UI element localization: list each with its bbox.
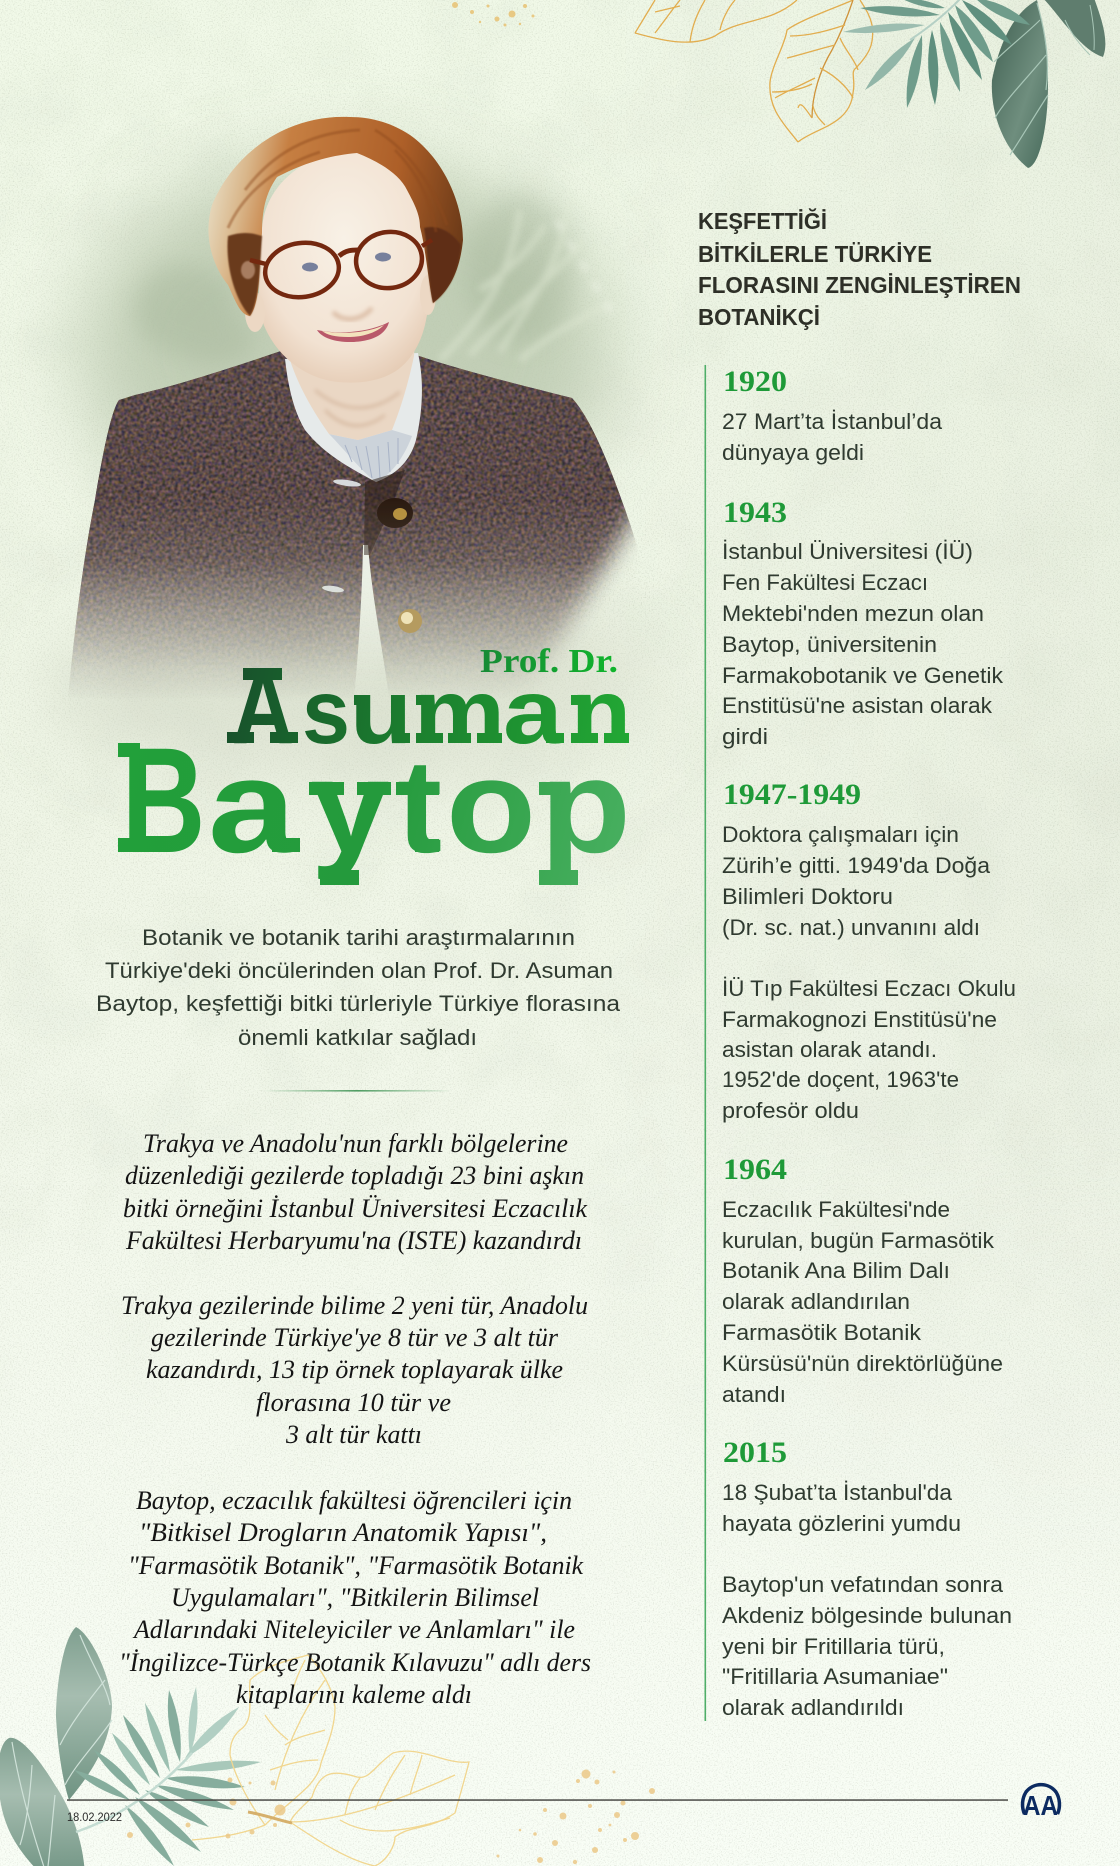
mouth <box>317 322 389 342</box>
paragraph: books: kitaplarını kaleme aldı <box>236 1680 472 1709</box>
paragraph: herbarium <box>123 1129 587 1255</box>
timeline entry: 1947-1949: profesör oldu <box>722 1098 859 1123</box>
timeline entry: 1943: İstanbul Üniversitesi (İÜ) <box>722 539 973 564</box>
title: Baytop: t <box>397 733 442 881</box>
timeline entry: 1920: dünyaya geldi <box>722 440 864 465</box>
title: Baytop: y <box>311 733 389 881</box>
timeline entry: 1943: Enstitüsü'ne asistan olarak <box>722 693 993 718</box>
button: dark <box>377 498 413 528</box>
timeline entry: 1947-1949: 1947-1949 <box>723 778 861 811</box>
date: 18.02.2022 <box>67 1812 122 1824</box>
timeline entry: 2015 <box>722 1436 1012 1720</box>
paragraph: books <box>119 1486 591 1709</box>
timeline entry: 1920: 27 Mart’ta İstanbul’da <box>722 409 943 434</box>
right column heading: FLORASINI ZENGİNLEŞTİREN <box>698 272 1021 298</box>
decoration: gold splatter top <box>452 2 534 26</box>
decoration: bottom left leaves <box>0 1627 261 1866</box>
face <box>259 150 429 383</box>
paragraph: books: "İngilizce-Türkçe Botanik Kılavuzu" adlı ders <box>119 1648 591 1677</box>
decoration: bottom gold outline leaves <box>192 1655 469 1866</box>
paragraph: herbarium: Fakültesi Herbaryumu'na (ISTE) kazandırdı <box>125 1226 582 1255</box>
title: Asuman: A <box>232 650 294 765</box>
timeline entry: 2015: Akdeniz bölgesinde bulunan <box>722 1603 1012 1628</box>
paragraph: species: Trakya gezilerinde bilime 2 yeni tür, Anadolu <box>121 1291 588 1320</box>
paragraph: books: Baytop, eczacılık fakültesi öğrencileri için <box>136 1486 572 1515</box>
right column heading: BOTANİKÇİ <box>698 304 820 330</box>
timeline entry: 1943: Mektebi'nden mezun olan <box>722 601 984 626</box>
timeline entry: 1964: olarak adlandırılan <box>722 1289 910 1314</box>
timeline entry: 1920: 1920 <box>723 365 787 398</box>
timeline entry: 1964: Eczacılık Fakültesi'nde <box>722 1197 950 1222</box>
jacket and clothing <box>69 351 636 690</box>
timeline entry: 1964: 1964 <box>723 1153 787 1186</box>
timeline entry: 1947-1949: Bilimleri Doktoru <box>722 884 893 909</box>
title: Asuman: n <box>571 662 631 763</box>
paragraph: herbarium: Trakya ve Anadolu'nun farklı bölgelerine <box>143 1129 568 1158</box>
neck <box>290 351 414 440</box>
right column heading: BİTKİLERLE TÜRKİYE <box>698 241 932 267</box>
paragraph: herbarium: düzenlediği gezilerde topladığı 23 bini aşkın <box>125 1161 584 1190</box>
decoration: bottom gold splatter <box>127 1770 655 1864</box>
timeline entry: 1947-1949: İÜ Tıp Fakültesi Eczacı Okulu <box>722 976 1016 1001</box>
decoration: palm and dark leaves top right <box>843 0 1105 168</box>
timeline entry: 1943 <box>722 496 1004 749</box>
timeline entry: 1943: girdi <box>722 724 768 749</box>
timeline entry: 1964: Botanik Ana Bilim Dalı <box>722 1258 950 1283</box>
timeline entry: 1943: Fen Fakültesi Eczacı <box>722 570 928 595</box>
paragraph: books: Adlarındaki Niteleyiciler ve Anlamları" ile <box>132 1615 575 1644</box>
intro paragraph: Botanik ve botanik tarihi araştırmalarının <box>142 925 575 950</box>
title: Baytop: B <box>122 716 206 884</box>
timeline entry: 1920 <box>722 365 943 465</box>
right column heading <box>698 207 1021 330</box>
shirt collar <box>285 353 422 482</box>
intro paragraph: Baytop, keşfettiği bitki türleriyle Türkiye florasına <box>96 991 621 1016</box>
title: Asuman: m <box>414 662 505 763</box>
timeline entry: 2015: yeni bir Fritillaria türü, <box>722 1634 945 1659</box>
timeline entry: 2015: 2015 <box>723 1436 787 1469</box>
timeline <box>704 365 1016 1721</box>
biography italic text <box>119 1129 591 1709</box>
timeline entry: 1947-1949: Zürih’e gitti. 1949'da Doğa <box>722 853 991 878</box>
right column heading: KEŞFETTİĞİ <box>698 207 827 234</box>
nose shadow <box>333 308 372 319</box>
timeline entry: 2015: "Fritillaria Asumaniae" <box>722 1664 948 1689</box>
title: Asuman: s <box>302 662 350 763</box>
timeline entry: 1943: Baytop, üniversitenin <box>722 632 937 657</box>
glasses <box>250 228 432 302</box>
paragraph: species: kazandırdı, 13 tip örnek toplayarak ülke <box>146 1355 563 1384</box>
timeline entry: 2015: hayata gözlerini yumdu <box>722 1511 961 1536</box>
timeline entry: 1964: kurulan, bugün Farmasötik <box>722 1228 995 1253</box>
shirt placket <box>355 545 388 690</box>
paragraph: books: Uygulamaları", "Bitkilerin Bilimsel <box>171 1583 539 1612</box>
eyes <box>302 252 391 272</box>
paragraph: species: 3 alt tür kattı <box>285 1420 422 1449</box>
title: Asuman <box>227 650 631 765</box>
title: Asuman: u <box>350 662 412 763</box>
head <box>208 117 463 383</box>
timeline entry: 2015: olarak adlandırıldı <box>722 1695 904 1720</box>
footer <box>67 1785 1059 1824</box>
title: Asuman: a <box>503 662 565 763</box>
paragraph: books: "Bitkisel Drogların Anatomik Yapısı", <box>139 1518 547 1547</box>
timeline entry: 1947-1949: asistan olarak atandı. <box>722 1037 937 1062</box>
title: Baytop: a <box>208 733 297 881</box>
timeline entry: 1947-1949: (Dr. sc. nat.) unvanını aldı <box>722 915 980 940</box>
timeline entry: 1947-1949: Doktora çalışmaları için <box>722 822 959 847</box>
photo background haze <box>50 160 650 780</box>
timeline entry: 1964: atandı <box>722 1382 786 1407</box>
timeline entry: 1943: Farmakobotanik ve Genetik <box>722 663 1004 688</box>
paragraph: books: "Farmasötik Botanik", "Farmasötik Botanik <box>128 1551 583 1580</box>
timeline entry: 1964: Farmasötik Botanik <box>722 1320 922 1345</box>
timeline entry: 1964 <box>722 1153 1003 1407</box>
portrait photograph <box>50 117 660 780</box>
intro paragraph: Türkiye'deki öncülerinden olan Prof. Dr. Asuman <box>105 958 613 983</box>
paragraph: species <box>121 1291 588 1449</box>
decoration: gold outline leaves top <box>635 0 873 142</box>
paragraph: herbarium: bitki örneğini İstanbul Üniversitesi Eczacılık <box>123 1194 587 1223</box>
paragraph: species: florasına 10 tür ve <box>256 1388 451 1417</box>
timeline entry: 2015: 18 Şubat’ta İstanbul'da <box>722 1480 953 1505</box>
timeline entry: 1947-1949: Farmakognozi Enstitüsü'ne <box>722 1007 997 1032</box>
paragraph: species: gezilerinde Türkiye'ye 8 tür ve 3 alt tür <box>151 1323 559 1352</box>
title: Baytop: p <box>540 733 631 881</box>
timeline entry: 1964: Kürsüsü'nün direktörlüğüne <box>722 1351 1003 1376</box>
timeline entry: 1943: 1943 <box>723 496 787 529</box>
title: Prof. Dr.: Prof. Dr. <box>480 643 618 680</box>
intro paragraph <box>96 925 621 1050</box>
button: gold <box>398 609 422 633</box>
timeline entry: 1947-1949 <box>722 778 1016 1123</box>
logo: AA: AA <box>1023 1790 1058 1821</box>
name title <box>118 643 631 885</box>
intro paragraph: önemli katkılar sağladı <box>238 1025 477 1050</box>
timeline entry: 1947-1949: 1952'de doçent, 1963'te <box>722 1067 959 1092</box>
timeline entry: 2015: Baytop'un vefatından sonra <box>722 1572 1004 1597</box>
title: Baytop: o <box>446 733 536 881</box>
hair <box>208 117 463 316</box>
title: Baytop <box>118 716 631 885</box>
